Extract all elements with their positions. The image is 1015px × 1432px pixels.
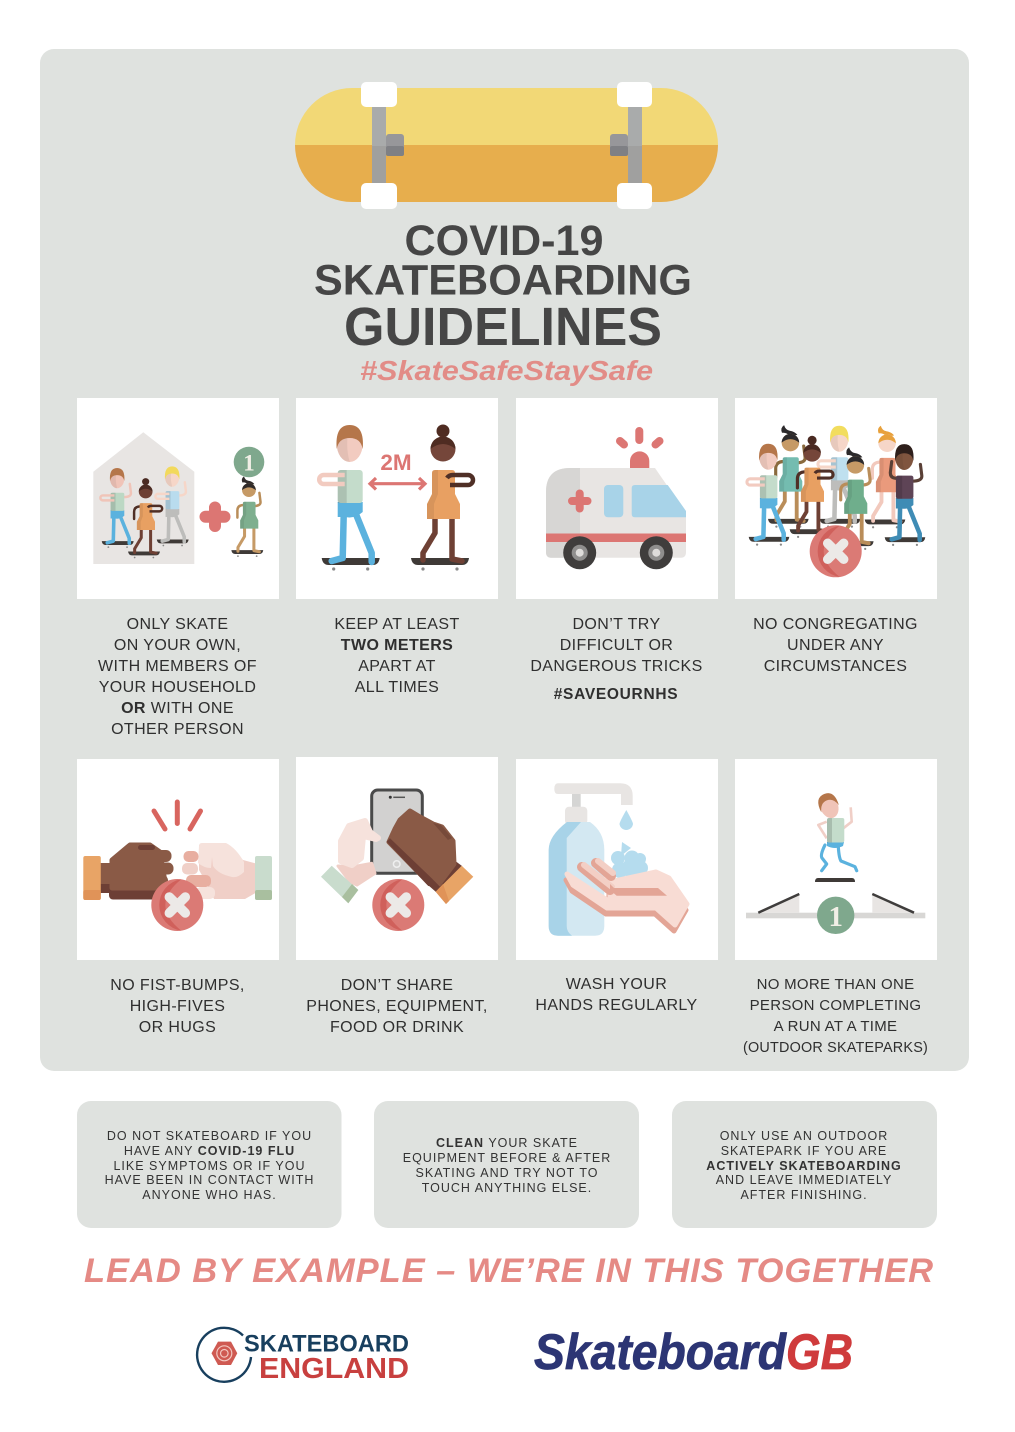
text: one person: A RUN AT A TIME: [774, 1018, 897, 1035]
panel: wash hands: [516, 759, 718, 1014]
callout: outdoor skatepark use: ONLY USE AN OUTDOOR: [720, 1129, 888, 1143]
text: congregating: CIRCUMSTANCES: [764, 658, 907, 675]
slogan: LEAD BY EXAMPLE – WE’RE IN THIS TOGETHER: [84, 1252, 933, 1290]
text: skate alone: YOUR HOUSEHOLD: [99, 679, 256, 696]
icon: crowd of skaters: [747, 425, 925, 577]
icon: soap dispenser and hand: [549, 783, 687, 936]
text: one person: (OUTDOOR SKATEPARKS): [743, 1040, 928, 1056]
panel: no dangerous tricks: [516, 398, 718, 703]
text: wash hands: WASH YOUR: [566, 976, 667, 993]
icon: two skaters two metres apart: 2M: [380, 450, 412, 475]
text: tricks: DIFFICULT OR: [560, 637, 673, 654]
text: congregating: [753, 616, 918, 675]
title: COVID-19: [404, 217, 604, 265]
text: congregating: NO CONGREGATING: [753, 616, 918, 633]
icon: shared phone crossed out: [321, 790, 473, 931]
logo: Skateboard GB: Skateboard: [534, 1324, 787, 1380]
callout: clean equipment: [374, 1101, 639, 1228]
panel: keep two meters apart: [296, 398, 498, 696]
callout: clean equipment: CLEAN YOUR SKATE: [436, 1136, 578, 1150]
text: skate alone: ON YOUR OWN,: [114, 637, 241, 654]
icon: skateboard: [295, 82, 718, 209]
text: one person: PERSON COMPLETING: [750, 997, 921, 1014]
text: one person: NO MORE THAN ONE: [757, 976, 914, 993]
text: fist-bumps: HIGH-FIVES: [130, 998, 225, 1015]
text: skate alone: OTHER PERSON: [111, 721, 244, 738]
text: skate alone: ONLY SKATE: [127, 616, 228, 633]
text: do not share: [306, 977, 488, 1036]
icon: ambulance: [546, 431, 686, 569]
text: fist-bumps: NO FIST-BUMPS,: [110, 977, 245, 994]
logo: Skateboard England: ENGLAND: [259, 1353, 409, 1385]
logo: Skateboard GB: GB: [786, 1324, 853, 1380]
callout: clean equipment: SKATING AND TRY NOT TO: [416, 1166, 598, 1180]
text: two meters: [334, 616, 460, 696]
icon: household with one other person: 1: [243, 450, 255, 476]
text: two meters: TWO METERS: [341, 637, 453, 654]
callout: do not skate with symptoms: HAVE BEEN IN CONTACT WITH: [105, 1173, 314, 1187]
callout: do not skate with symptoms: DO NOT SKATEBOARD IF YOU: [107, 1129, 312, 1143]
text: do not share: DON’T SHARE: [341, 977, 453, 994]
callout: clean equipment: EQUIPMENT BEFORE & AFTER: [403, 1151, 611, 1165]
callout: outdoor skatepark use: [672, 1101, 937, 1228]
callout: do not skate with symptoms: ANYONE WHO HAS.: [142, 1188, 277, 1202]
title: GUIDELINES: [344, 297, 662, 357]
text: tricks: DON’T TRY: [572, 616, 661, 633]
text: two meters: ALL TIMES: [355, 679, 439, 696]
text: skate alone: [98, 616, 257, 738]
panel: do not share: [296, 757, 498, 1036]
text: congregating: UNDER ANY: [787, 637, 884, 654]
title: [314, 217, 692, 357]
text: fist-bumps: OR HUGS: [139, 1019, 216, 1036]
callout: do not skate with symptoms: HAVE ANY COVID-19 FLU: [124, 1144, 295, 1158]
title: SKATEBOARDING: [314, 256, 692, 304]
panel: no congregating: [735, 398, 937, 675]
text: wash hands: HANDS REGULARLY: [535, 997, 698, 1014]
callout: do not skate with symptoms: LIKE SYMPTOMS OR IF YOU: [113, 1159, 306, 1173]
text: tricks: [530, 616, 703, 703]
callout: outdoor skatepark use: AND LEAVE IMMEDIATELY: [716, 1173, 892, 1187]
panel: no fist-bumps: [77, 759, 279, 1036]
icon: household with one other person: [93, 432, 265, 564]
text: tricks: #SAVEOURNHS: [554, 686, 678, 703]
icon: skater above ramps: 1: [828, 901, 843, 933]
panel: guidelines: [40, 49, 969, 1071]
text: two meters: APART AT: [358, 658, 436, 675]
logo: Skateboard England: [197, 1328, 409, 1385]
callout: clean equipment: TOUCH ANYTHING ELSE.: [422, 1181, 592, 1195]
callout: do not skate with symptoms: [77, 1101, 342, 1228]
icon: fist bump crossed out: [83, 802, 272, 931]
text: one person: [743, 976, 928, 1056]
panel: skate alone or with one other: [77, 398, 279, 738]
callout: outdoor skatepark use: ACTIVELY SKATEBOARDING: [706, 1159, 902, 1173]
text: do not share: FOOD OR DRINK: [330, 1019, 464, 1036]
hashtag: #SkateSafeStaySafe: [360, 355, 653, 386]
text: skate alone: WITH MEMBERS OF: [98, 658, 257, 675]
callout: outdoor skatepark use: SKATEPARK IF YOU ARE: [721, 1144, 887, 1158]
icon: two skaters two metres apart: [319, 424, 473, 571]
callout: outdoor skatepark use: AFTER FINISHING.: [740, 1188, 868, 1202]
text: wash hands: [535, 976, 698, 1014]
text: fist-bumps: [110, 977, 245, 1036]
logo: Skateboard England: SKATEBOARD: [244, 1330, 409, 1358]
icon: skater above ramps: [746, 790, 925, 934]
text: tricks: DANGEROUS TRICKS: [530, 658, 703, 675]
panel: one person per run: [735, 759, 937, 1056]
text: skate alone: OR WITH ONE: [121, 700, 234, 717]
text: do not share: PHONES, EQUIPMENT,: [306, 998, 488, 1015]
text: two meters: KEEP AT LEAST: [334, 616, 460, 633]
